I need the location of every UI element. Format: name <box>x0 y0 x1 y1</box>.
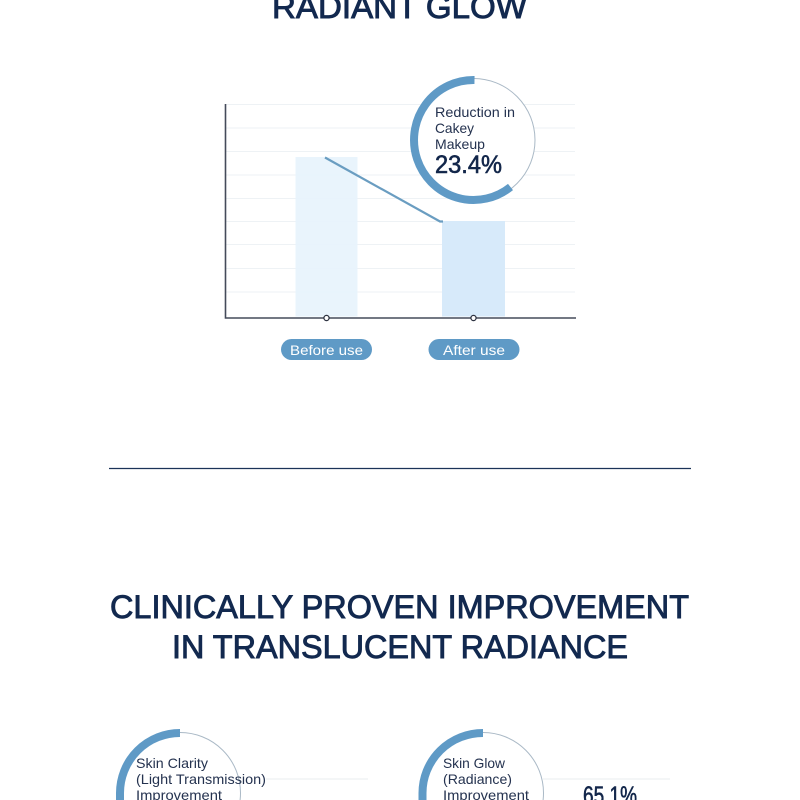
label text <box>136 755 266 800</box>
label text: (Radiance) <box>443 771 512 787</box>
callout: reduction in cakey makeup: Reduction in <box>435 104 515 120</box>
bar: before use <box>296 157 358 316</box>
label text: Skin Glow <box>443 755 506 771</box>
leader line <box>543 778 670 780</box>
label pill: after use: After use <box>443 342 505 358</box>
label text: (Light Transmission) <box>136 771 266 787</box>
leader line <box>266 778 368 780</box>
label pill: before use: Before use <box>290 342 363 358</box>
panel: skin clarity <box>120 732 368 800</box>
label pill: after use <box>428 339 520 360</box>
panel: cakey makeup bar chart <box>226 78 576 360</box>
callout: reduction in cakey makeup: 23.4% <box>435 151 502 179</box>
bar: after use <box>442 221 505 316</box>
axis marker: before use <box>324 315 329 321</box>
trend line <box>325 158 443 222</box>
grid lines <box>226 104 575 292</box>
callout: reduction in cakey makeup <box>412 78 535 202</box>
ring gauge <box>422 732 544 800</box>
label text: Skin Clarity <box>136 755 208 771</box>
label pill: before use <box>281 339 372 360</box>
callout: reduction in cakey makeup: Cakey <box>435 120 474 136</box>
panel: skin glow <box>422 732 670 800</box>
heading: clinically proven improvement: CLINICALLY PROVEN IMPROVEMENT <box>110 589 689 625</box>
callout: reduction in cakey makeup: Makeup <box>435 136 485 152</box>
divider <box>109 468 691 470</box>
chart axes <box>226 104 576 318</box>
ring gauge <box>120 732 240 800</box>
heading: clinically proven improvement: IN TRANSLUCENT RADIANCE <box>172 629 628 665</box>
axis marker: after use <box>471 315 476 321</box>
heading: clinically proven improvement <box>110 589 689 665</box>
label text <box>443 755 529 800</box>
